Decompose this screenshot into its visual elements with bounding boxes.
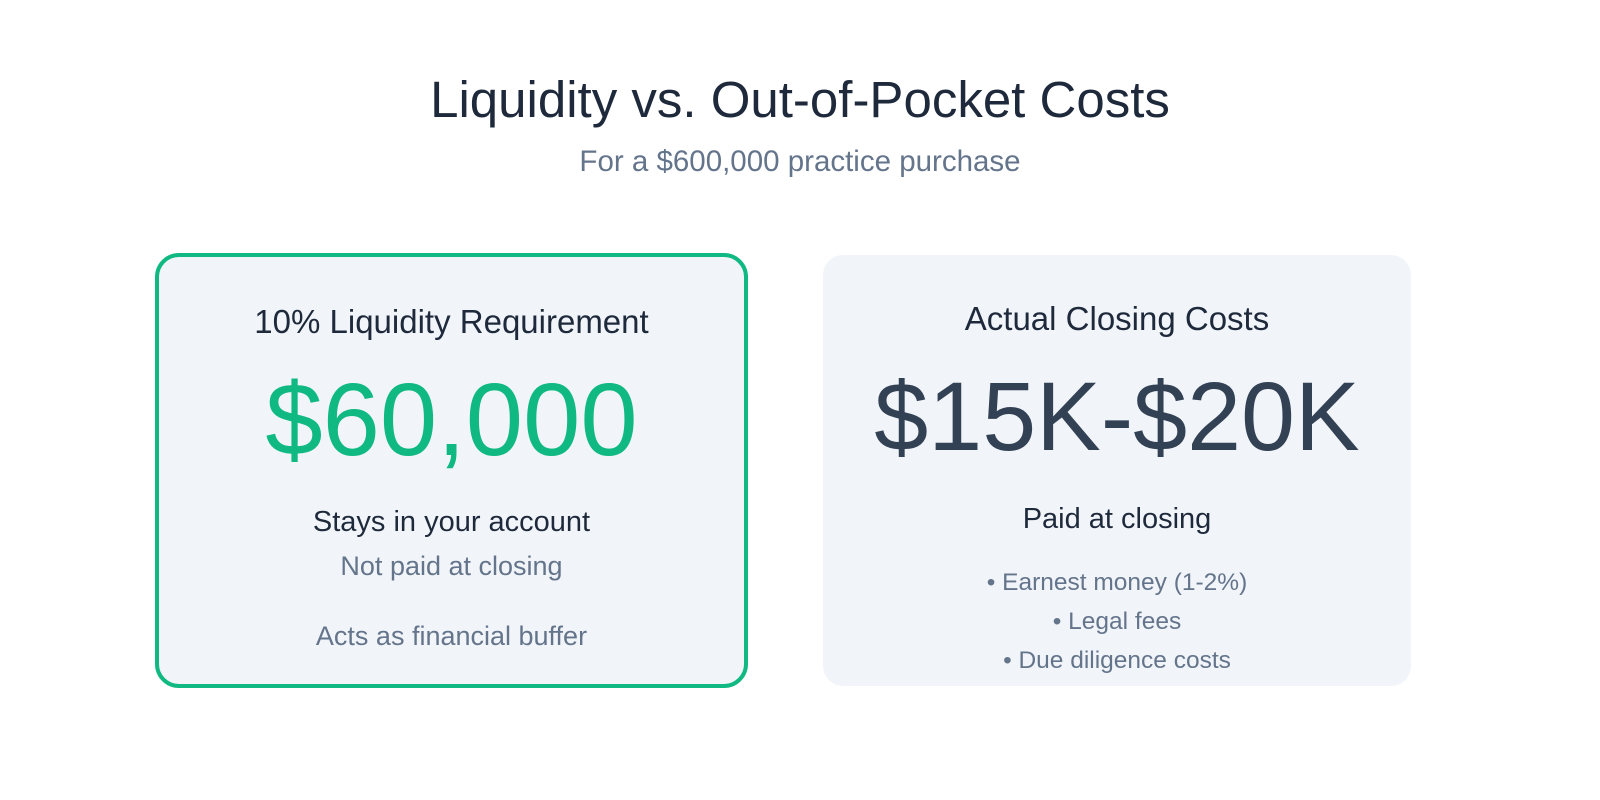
bullet list: • Earnest money (1-2%) [987,569,1247,596]
text: stays in account: Stays in your account [313,506,590,538]
panel: liquidity requirement [155,253,748,688]
text: not paid at closing: Not paid at closing [340,551,563,581]
panel: closing costs [823,255,1411,686]
heading: closing costs: Actual Closing Costs [965,300,1269,337]
bullet list: • Legal fees [1053,608,1181,635]
big number: $60,000: $60,000 [265,362,638,477]
text: paid at closing: Paid at closing [1023,503,1211,535]
heading: liquidity: 10% Liquidity Requirement [254,303,649,340]
title: Liquidity vs. Out-of-Pocket Costs [430,71,1170,128]
bullet list: • Due diligence costs [1003,647,1231,674]
bullet list [987,569,1247,674]
big number: $15K-$20K: $15K-$20K [874,362,1360,471]
subtitle: For a $600,000 practice purchase [579,145,1021,178]
text: financial buffer: Acts as financial buffer [316,621,587,651]
